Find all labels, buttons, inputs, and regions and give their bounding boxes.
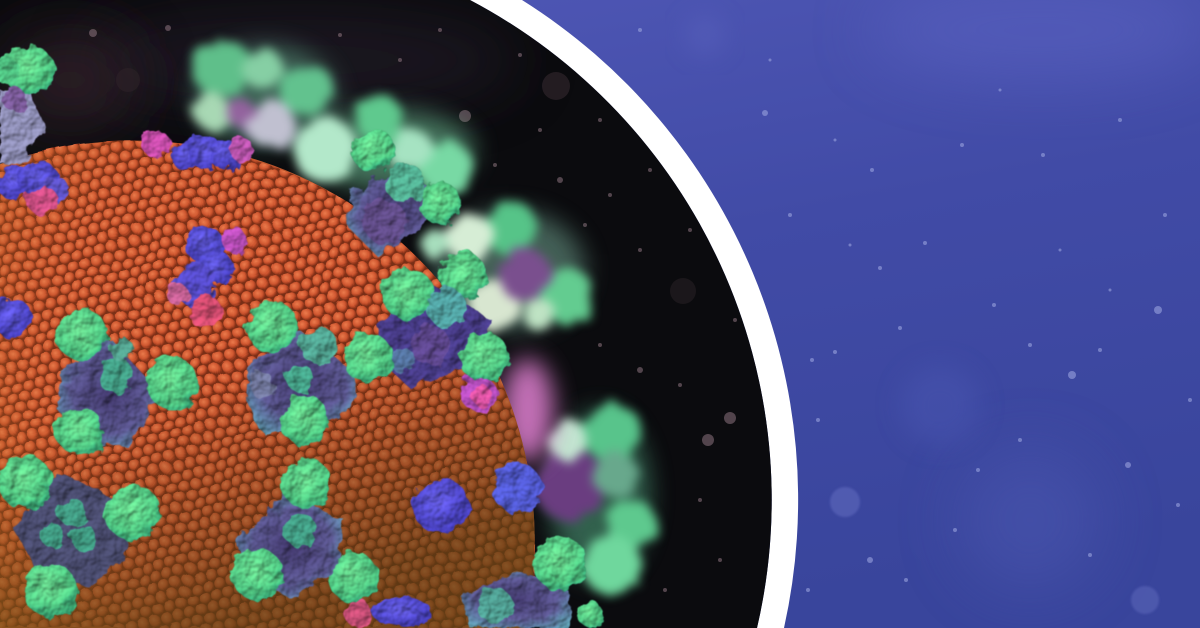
blue protein: upper left edge xyxy=(0,160,69,215)
front spike: centre xyxy=(246,301,393,445)
front spike: right of centre xyxy=(376,252,509,388)
glow behind back spikes xyxy=(195,45,650,580)
spike: back right xyxy=(421,201,594,331)
front spike: lower left xyxy=(0,455,160,617)
front spike: left xyxy=(56,309,198,455)
spike: back centre-top xyxy=(293,94,472,195)
pink glow behind sphere xyxy=(502,358,554,462)
blue protein: top xyxy=(143,131,254,170)
floating particles on blue xyxy=(638,28,1192,592)
spike: back lower right xyxy=(534,403,656,595)
bottom blue protein xyxy=(344,597,432,627)
orange virus sphere xyxy=(0,141,535,628)
blue protein: middle left xyxy=(167,226,247,329)
blue protein: far left xyxy=(0,298,32,338)
front spike: bottom right xyxy=(462,536,603,628)
blue protein: lower centre xyxy=(413,478,469,534)
front spike: top xyxy=(346,128,461,254)
front spike: lower centre xyxy=(231,459,378,602)
blurred background spikes xyxy=(193,39,656,595)
dust particles on black xyxy=(89,25,737,592)
spike: back top xyxy=(193,39,333,149)
blue protein: lower right xyxy=(492,463,542,513)
white circular frame ring xyxy=(470,0,798,628)
top-left spike xyxy=(0,45,54,165)
pink protein xyxy=(460,375,496,411)
circular image: virus on black xyxy=(0,0,780,628)
